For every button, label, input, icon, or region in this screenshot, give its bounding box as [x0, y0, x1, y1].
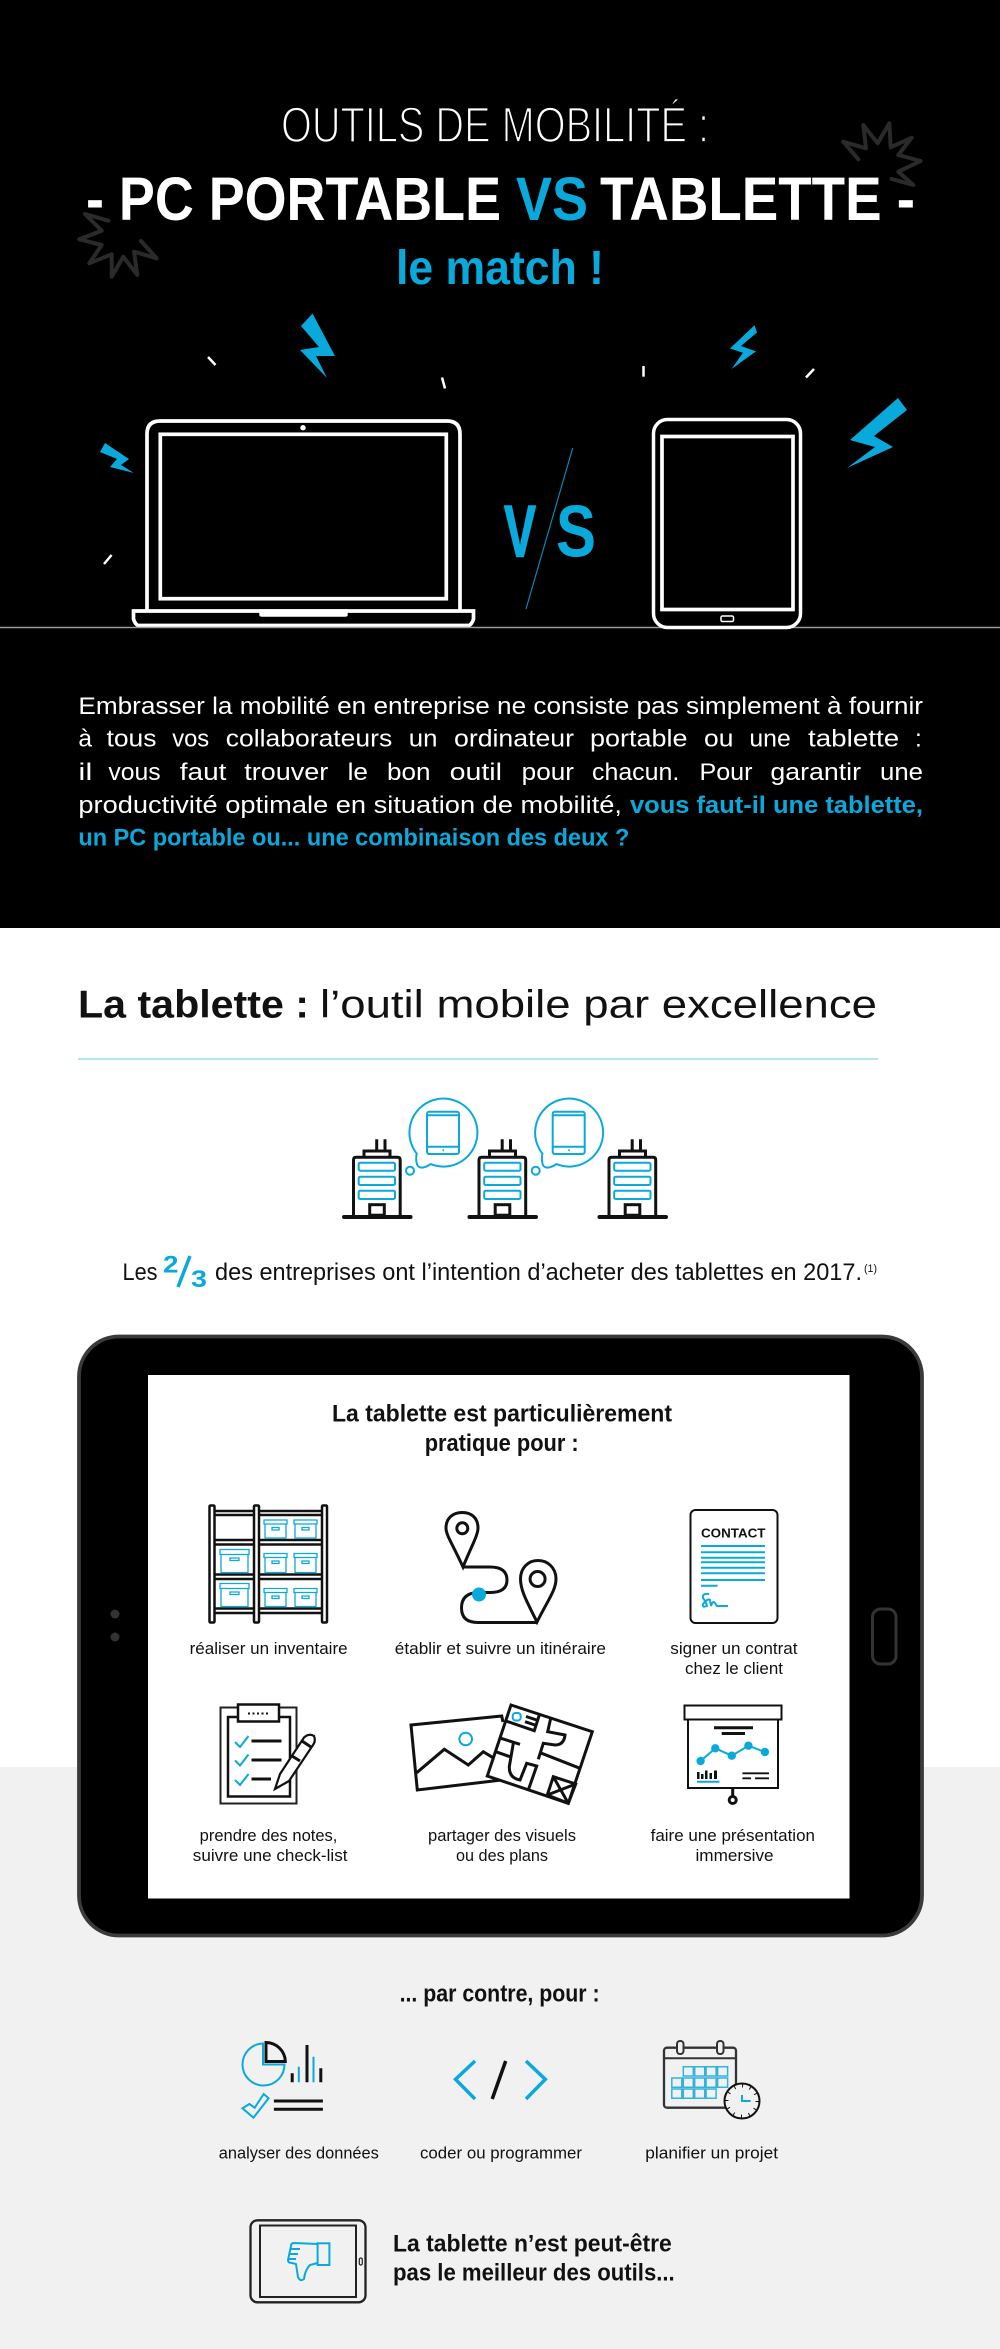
intro paragraph: à — [78, 726, 92, 753]
intro paragraph — [78, 693, 923, 852]
labels: tablet uses: établir et suivre un itinéraire — [395, 1640, 606, 1658]
labels: tablet uses: ou des plans — [456, 1847, 548, 1865]
icon: tablet outline — [654, 420, 800, 628]
icon: contract: CONTACT — [701, 1527, 766, 1541]
fraction 2/3 — [163, 1251, 207, 1293]
statistic: two thirds of companies: des entreprises ont l’intention d’acheter des tablettes en 2017. — [215, 1259, 862, 1286]
building 3 — [600, 1139, 666, 1217]
title line: PC portable vs tablette: TABLETTE - — [600, 165, 915, 233]
intro paragraph: vous faut-il une tablette, — [630, 792, 923, 819]
intro paragraph: chacun. — [592, 759, 679, 786]
bubble 2 — [532, 1099, 603, 1175]
icon: lightning bolts — [100, 314, 907, 473]
VS mark: V — [504, 491, 536, 572]
section heading — [78, 984, 877, 1027]
spark ticks — [104, 357, 814, 564]
VS mark — [504, 448, 596, 609]
labels: tablet uses: suivre une check-list — [193, 1847, 348, 1865]
intro paragraph: outil — [450, 759, 502, 786]
intro paragraph: : — [915, 726, 922, 753]
statistic: two thirds of companies — [122, 1251, 877, 1293]
title line: PC portable vs tablette: - PC PORTABLE — [86, 165, 501, 233]
labels: tablet uses — [190, 1640, 815, 1865]
section heading: l’outil mobile par excellence — [320, 984, 877, 1027]
labels: tablet limits: analyser des données — [219, 2144, 379, 2162]
title line: outils de mobilité: OUTILS DE MOBILITÉ : — [281, 97, 709, 153]
intro paragraph: pour — [522, 759, 574, 786]
labels: tablet uses: chez le client — [685, 1660, 783, 1678]
intro paragraph: portable — [590, 726, 688, 753]
building 1 — [344, 1139, 410, 1217]
intro paragraph: Embrasser la mobilité en entreprise ne consiste pas simplement à fournir — [78, 693, 923, 720]
burst: top right — [843, 123, 921, 185]
panel heading: tablet uses: La tablette est particulièrement — [332, 1401, 672, 1428]
intro paragraph: un — [409, 726, 438, 753]
labels: tablet uses: immersive — [696, 1847, 774, 1865]
burst: left — [79, 214, 157, 277]
icon: laptop — [134, 421, 474, 626]
building 2 — [470, 1139, 536, 1217]
panel heading: tablet uses — [332, 1401, 672, 1457]
statistic: two thirds of companies: (1) — [864, 1263, 877, 1275]
title line: PC portable vs tablette — [86, 165, 915, 233]
icon: calendar and clock — [664, 2041, 760, 2118]
intro paragraph: un PC portable ou... une combinaison des deux ? — [78, 825, 629, 852]
intro paragraph: vos — [172, 726, 209, 753]
intro paragraph: ou — [704, 726, 733, 753]
title line: le match: le match ! — [396, 242, 604, 295]
bubble 1 — [406, 1099, 477, 1175]
intro paragraph: collaborateurs — [226, 726, 392, 753]
subheading: par contre: ... par contre, pour : — [400, 1981, 600, 2008]
VS mark: S — [556, 491, 596, 572]
intro paragraph: une — [880, 759, 923, 786]
conclusion text: pas le meilleur des outils... — [393, 2260, 675, 2287]
intro paragraph: trouver — [244, 759, 328, 786]
labels: tablet uses: prendre des notes, — [200, 1827, 337, 1845]
statistic: two thirds of companies: Les — [122, 1259, 158, 1286]
intro paragraph: il — [78, 759, 92, 786]
ground line — [0, 626, 1000, 628]
intro paragraph: vous — [108, 759, 161, 786]
intro paragraph: Pour — [700, 759, 752, 786]
labels: tablet uses: signer un contrat — [670, 1640, 798, 1658]
icon: inventory shelves — [210, 1506, 327, 1622]
labels: tablet uses: partager des visuels — [428, 1827, 576, 1845]
intro paragraph: garantir — [770, 759, 861, 786]
intro paragraph: ordinateur — [454, 726, 574, 753]
conclusion text — [393, 2231, 675, 2287]
intro paragraph: tablette — [808, 726, 899, 753]
panel heading: tablet uses: pratique pour : — [425, 1430, 579, 1457]
section heading: La tablette : — [78, 984, 309, 1027]
icon: presentation screen — [684, 1706, 782, 1804]
icon: code — [456, 2061, 545, 2099]
intro paragraph: tous — [106, 726, 156, 753]
intro paragraph: bon — [387, 759, 430, 786]
icon: map route with pins — [446, 1512, 556, 1622]
icon: buildings with tablet bubbles — [344, 1099, 666, 1217]
intro paragraph: faut — [180, 759, 227, 786]
intro paragraph: productivité optimale en situation de mobilité, — [78, 792, 622, 819]
icon: contract — [690, 1510, 778, 1623]
labels: tablet limits: coder ou programmer — [420, 2144, 583, 2162]
intro paragraph: le — [348, 759, 368, 786]
icon: clipboard check-list — [220, 1704, 315, 1804]
intro paragraph: une — [749, 726, 791, 753]
labels: tablet uses: réaliser un inventaire — [190, 1640, 348, 1658]
fraction 2/3: 3 — [191, 1266, 207, 1293]
title line: PC portable vs tablette: VS — [516, 165, 588, 233]
labels: tablet limits: planifier un projet — [645, 2144, 778, 2162]
panel: large tablet frame — [79, 1336, 922, 1936]
icon: data analysis — [242, 2042, 323, 2118]
title — [86, 97, 915, 295]
fraction 2/3: 2 — [163, 1251, 178, 1278]
labels: tablet uses: faire une présentation — [651, 1827, 815, 1845]
icon: pictures and floor plan — [411, 1705, 592, 1803]
icon: tablet with thumbs down — [250, 2220, 366, 2302]
conclusion text: La tablette n’est peut-être — [393, 2231, 672, 2258]
labels: tablet limits — [219, 2144, 778, 2162]
